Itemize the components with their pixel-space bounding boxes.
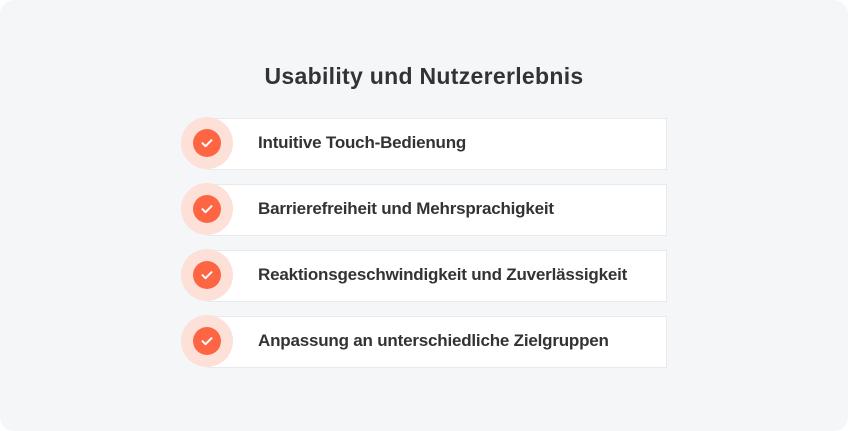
text: Anpassung an unterschiedliche Zielgruppen bbox=[258, 331, 609, 350]
text: Intuitive Touch-Bedienung bbox=[258, 133, 466, 152]
icon: check bbox=[181, 117, 233, 169]
item 3 bbox=[181, 249, 667, 302]
icon: check bbox=[181, 183, 233, 235]
title: Usability und Nutzererlebnis bbox=[265, 63, 583, 89]
icon: check bbox=[181, 249, 233, 301]
item 1 bbox=[181, 117, 667, 170]
text: Reaktionsgeschwindigkeit und Zuverlässigkeit bbox=[258, 265, 627, 284]
item 2 bbox=[181, 183, 667, 236]
icon: check bbox=[181, 315, 233, 367]
item 4 bbox=[181, 315, 667, 368]
text: Barrierefreiheit und Mehrsprachigkeit bbox=[258, 199, 554, 218]
